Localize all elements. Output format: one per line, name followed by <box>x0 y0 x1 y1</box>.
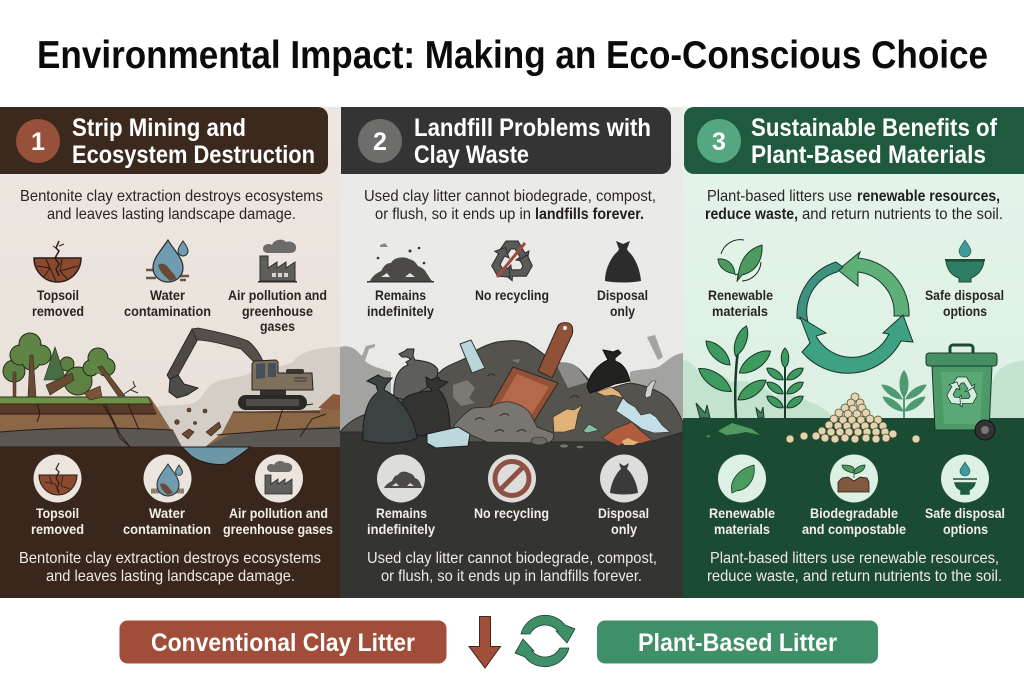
label: renewable materials: Renewable <box>708 287 773 303</box>
water pool <box>182 447 250 464</box>
bottom labels panel 3: Safe disposal <box>925 505 1005 521</box>
panel 3 header: Sustainable Benefits of <box>751 114 998 142</box>
bottom labels panel 1: contamination <box>123 521 211 537</box>
trees <box>3 333 138 400</box>
bottom labels panel 1: Air pollution and <box>229 505 328 521</box>
icon: renewable leaf <box>718 240 762 282</box>
excavator <box>167 328 313 410</box>
legend: plant-based litter button: Plant-Based Litter <box>638 629 837 657</box>
label: remains indefinitely: indefinitely <box>367 303 434 319</box>
bottom labels panel 3: and compostable <box>802 521 906 537</box>
background sprout <box>879 370 929 418</box>
soil patch under plant <box>706 423 760 438</box>
panel 3 closing text: Plant-based litters use renewable resources, <box>710 550 999 567</box>
legend: conventional clay litter button <box>120 620 446 664</box>
panel 1 intro text: and leaves lasting landscape damage. <box>47 206 296 223</box>
panel 1 closing text <box>19 550 321 585</box>
bottom labels panel 3: options <box>943 521 988 537</box>
label: topsoil removed: removed <box>32 303 84 319</box>
illustration: strip mine scene <box>0 328 340 464</box>
bottom labels panel 2: Remains <box>376 505 427 521</box>
panel 1 intro text <box>20 188 323 223</box>
label: air pollution and greenhouse gases: greenhouse <box>242 303 313 319</box>
rocks and debris <box>175 408 221 439</box>
label: air pollution and greenhouse gases: Air pollution and <box>228 287 327 303</box>
bottom labels panel 1: Topsoil <box>36 505 79 521</box>
bottom labels panel 1: greenhouse gases <box>223 521 333 537</box>
label: topsoil removed <box>32 287 84 319</box>
icon: topsoil removed <box>34 241 81 282</box>
icon: no recycling <box>486 241 536 286</box>
panel 2 header: Landfill Problems with <box>414 114 651 142</box>
bottom labels panel 3: Biodegradable <box>810 505 898 521</box>
heap texture <box>453 359 520 406</box>
plants <box>695 324 805 418</box>
bottom labels panel 1: Water <box>149 505 186 521</box>
heap <box>340 341 683 442</box>
label: safe disposal options: Safe disposal <box>925 287 1004 303</box>
panel 1 closing text: Bentonite clay extraction destroys ecosystems <box>19 550 321 567</box>
bottom icons row panel 2 <box>377 454 648 502</box>
panel 3 intro text <box>705 188 1003 223</box>
panel 3 header: 3 <box>712 128 726 156</box>
panel 2 intro text: Used clay litter cannot biodegrade, compost, <box>364 188 656 205</box>
label: safe disposal options: options <box>943 303 987 319</box>
bottom icons row panel 3 <box>718 454 989 502</box>
icon: safe disposal <box>945 240 985 282</box>
panel: landfill <box>340 107 683 598</box>
litter mound <box>453 402 554 443</box>
label: water contamination <box>124 287 211 319</box>
box <box>427 427 470 448</box>
label: disposal only <box>597 287 648 319</box>
panel 2 closing text: or flush, so it ends up in landfills forever. <box>381 568 642 585</box>
label: water contamination: Water <box>150 287 185 303</box>
panel 2 intro text: landfills forever. <box>535 206 644 223</box>
bottom labels panel 2: indefinitely <box>367 521 435 537</box>
panel 3 intro text: reduce waste, <box>705 206 798 223</box>
panel 2 closing text <box>367 550 657 585</box>
panel 2 intro text <box>364 188 656 223</box>
icon: factory air pollution <box>258 240 297 282</box>
background hills <box>683 360 1024 418</box>
scoop <box>490 323 573 423</box>
label: air pollution and greenhouse gases <box>228 287 327 334</box>
panel 3 closing text: reduce waste, and return nutrients to the soil. <box>707 568 1002 585</box>
plastic bits and paper <box>531 381 670 448</box>
panel 1 intro text: Bentonite clay extraction destroys ecosystems <box>20 188 323 205</box>
panel 1 header: Strip Mining and <box>72 114 246 142</box>
panel 1 header <box>0 107 328 174</box>
dust haze <box>155 347 340 447</box>
icon: cycle arrows <box>797 252 913 373</box>
bottom labels panel 2 <box>367 505 649 537</box>
garbage bags <box>363 349 630 443</box>
label: topsoil removed: Topsoil <box>37 287 79 303</box>
bottom icons row panel 1 <box>34 454 303 502</box>
label: remains indefinitely: Remains <box>375 287 426 303</box>
label: renewable materials <box>708 287 773 319</box>
arrow: down <box>469 616 500 668</box>
label: water contamination: contamination <box>124 303 211 319</box>
panel 2 header: 2 <box>373 128 387 156</box>
right soil bank <box>205 394 340 447</box>
legend: plant-based litter button <box>597 620 878 664</box>
icon: trash bag <box>605 241 641 282</box>
label: safe disposal options <box>925 287 1004 319</box>
left soil bank <box>0 397 182 447</box>
label: no recycling: No recycling <box>475 287 549 303</box>
icon: waste heap <box>367 243 434 282</box>
bottom labels panel 1 <box>31 505 333 537</box>
recycling bin <box>926 345 997 440</box>
panel 2 header <box>341 107 671 174</box>
label: renewable materials: materials <box>712 303 768 319</box>
panel 3 intro text: and return nutrients to the soil. <box>802 206 1003 223</box>
panel 2 header: Clay Waste <box>414 141 529 169</box>
panel 3 intro text: Plant-based litters use <box>707 188 852 205</box>
icon: water contamination <box>146 240 189 282</box>
panel 3 header <box>684 107 1024 174</box>
panel: plant-based <box>683 107 1024 598</box>
bottle <box>460 340 485 373</box>
panel 1 header: 1 <box>31 128 45 156</box>
panel 2 intro text: or flush, so it ends up in <box>375 206 531 223</box>
illustration: landfill pile <box>340 323 683 448</box>
bottom labels panel 3: Renewable <box>709 505 775 521</box>
bottom labels panel 2: Disposal <box>598 505 649 521</box>
legend: conventional clay litter button: Conventional Clay Litter <box>151 629 415 657</box>
bottom labels panel 2: No recycling <box>474 505 549 521</box>
bottom labels panel 3 <box>709 505 1005 537</box>
bottom labels panel 2: only <box>611 521 637 537</box>
panel 1 header: Ecosystem Destruction <box>72 141 315 169</box>
label: air pollution and greenhouse gases: gases <box>260 318 295 334</box>
background skyline <box>340 335 683 432</box>
bottom labels panel 3: materials <box>714 521 770 537</box>
bottom labels panel 1: removed <box>31 521 84 537</box>
label: disposal only: only <box>610 303 635 319</box>
panel 2 closing text: Used clay litter cannot biodegrade, compost, <box>367 550 657 567</box>
panel 1 closing text: and leaves lasting landscape damage. <box>46 568 295 585</box>
label: disposal only: Disposal <box>597 287 648 303</box>
icon: recycle arrows <box>515 615 575 667</box>
panel 3 closing text <box>707 550 1002 585</box>
panel 3 intro text: renewable resources, <box>857 188 1000 205</box>
panel: strip mining <box>0 107 340 598</box>
label: remains indefinitely <box>367 287 434 319</box>
litter pellet pile <box>786 393 920 443</box>
panel 3 header: Plant-Based Materials <box>751 141 986 169</box>
